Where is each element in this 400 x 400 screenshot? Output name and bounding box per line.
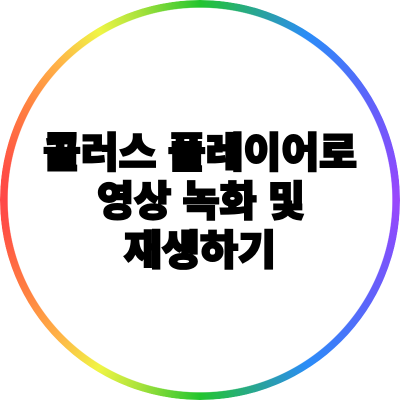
title line 3: 재생하기 xyxy=(124,228,276,274)
title line 1: 콜러스 플레이어로 xyxy=(43,130,357,176)
title line 2: 영상 녹화 및 xyxy=(97,178,305,224)
